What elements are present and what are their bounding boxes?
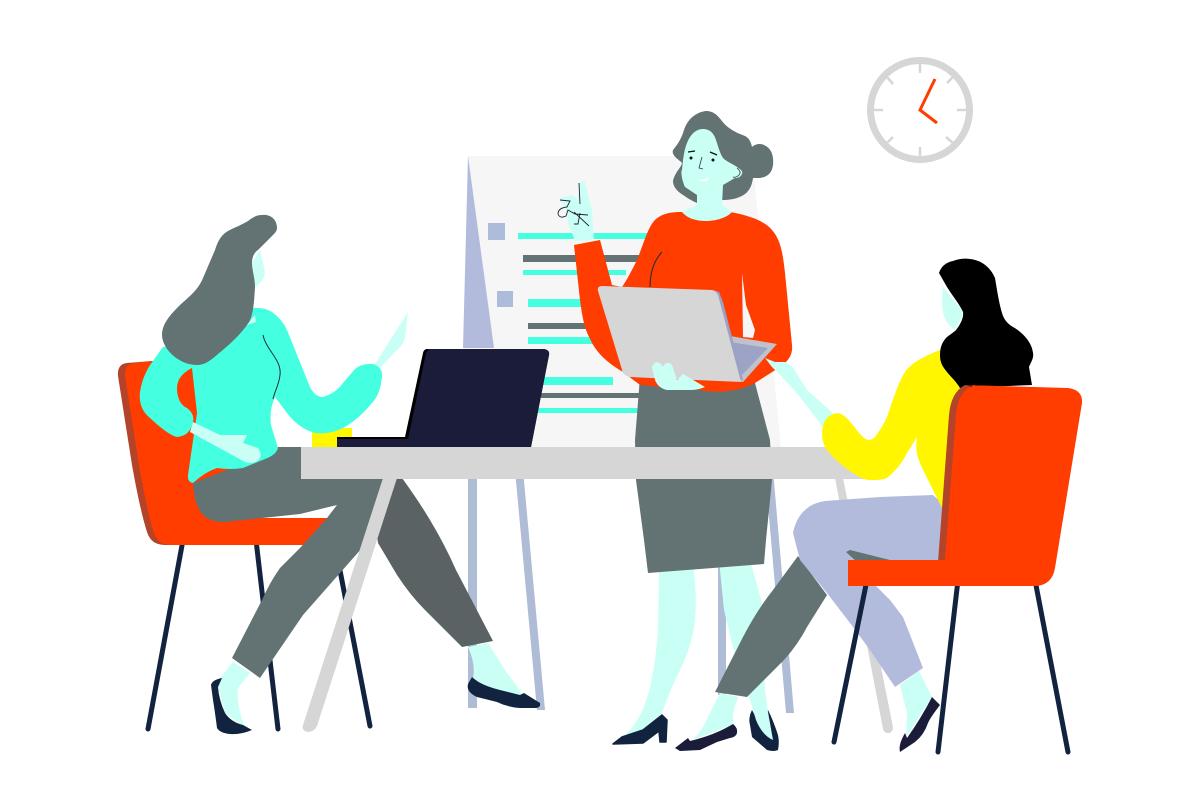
board: checklist squares — [488, 223, 513, 307]
chair shell — [848, 385, 1082, 586]
back leg — [370, 478, 493, 647]
chair legs — [834, 580, 1068, 752]
front foot — [217, 662, 250, 727]
neck and face — [681, 129, 742, 221]
back foot — [468, 643, 523, 695]
left shoe — [675, 724, 737, 751]
face — [942, 287, 962, 330]
table — [301, 447, 893, 733]
chair legs — [148, 540, 370, 729]
grey leg — [715, 556, 827, 697]
table legs — [303, 478, 893, 733]
hips and front leg — [193, 447, 385, 678]
facial features — [688, 151, 740, 181]
torso and right arm — [188, 308, 382, 483]
laptop lid — [598, 286, 741, 382]
left foot — [692, 693, 738, 740]
laptop base — [720, 336, 777, 382]
back shoe — [749, 710, 779, 751]
right shoe — [900, 697, 940, 752]
sweater notch — [742, 273, 755, 338]
laptop lid edge — [713, 290, 743, 380]
left arm — [140, 340, 195, 437]
left woman — [140, 215, 540, 734]
hair — [939, 259, 1033, 388]
neck — [247, 315, 256, 325]
forearm — [190, 422, 261, 463]
right woman — [675, 259, 1033, 752]
chair shell shadow — [118, 360, 190, 545]
left chair — [118, 360, 370, 729]
left leg — [625, 565, 696, 735]
front shoe — [613, 715, 667, 744]
skirt — [635, 377, 772, 573]
tabletop — [301, 447, 866, 479]
hand under laptop — [652, 362, 705, 390]
sweater — [822, 350, 965, 508]
board: aqua lines — [518, 233, 647, 413]
chair shell — [125, 360, 332, 545]
face — [252, 250, 265, 287]
pants fold — [846, 550, 890, 562]
board: grey lines — [523, 255, 640, 398]
prop: yellow mug — [312, 428, 352, 448]
sweater seam — [650, 252, 662, 287]
dark laptop — [337, 349, 549, 447]
hair — [673, 111, 773, 203]
back shoe — [468, 677, 540, 708]
extended forearm — [765, 358, 833, 427]
chair shell shadow — [938, 385, 985, 562]
raised hand — [558, 181, 594, 241]
paper in hand — [375, 312, 408, 368]
flipchart board — [463, 156, 781, 447]
right foot — [900, 671, 932, 737]
lavender pants — [793, 495, 950, 687]
front shoe — [211, 678, 252, 734]
right chair — [834, 385, 1082, 752]
back seam — [263, 335, 280, 399]
icon: wall clock — [870, 60, 970, 160]
flipchart legs — [468, 470, 794, 713]
sweater — [574, 206, 792, 392]
middle woman — [558, 111, 792, 751]
right leg — [719, 560, 773, 740]
hair — [162, 215, 277, 365]
